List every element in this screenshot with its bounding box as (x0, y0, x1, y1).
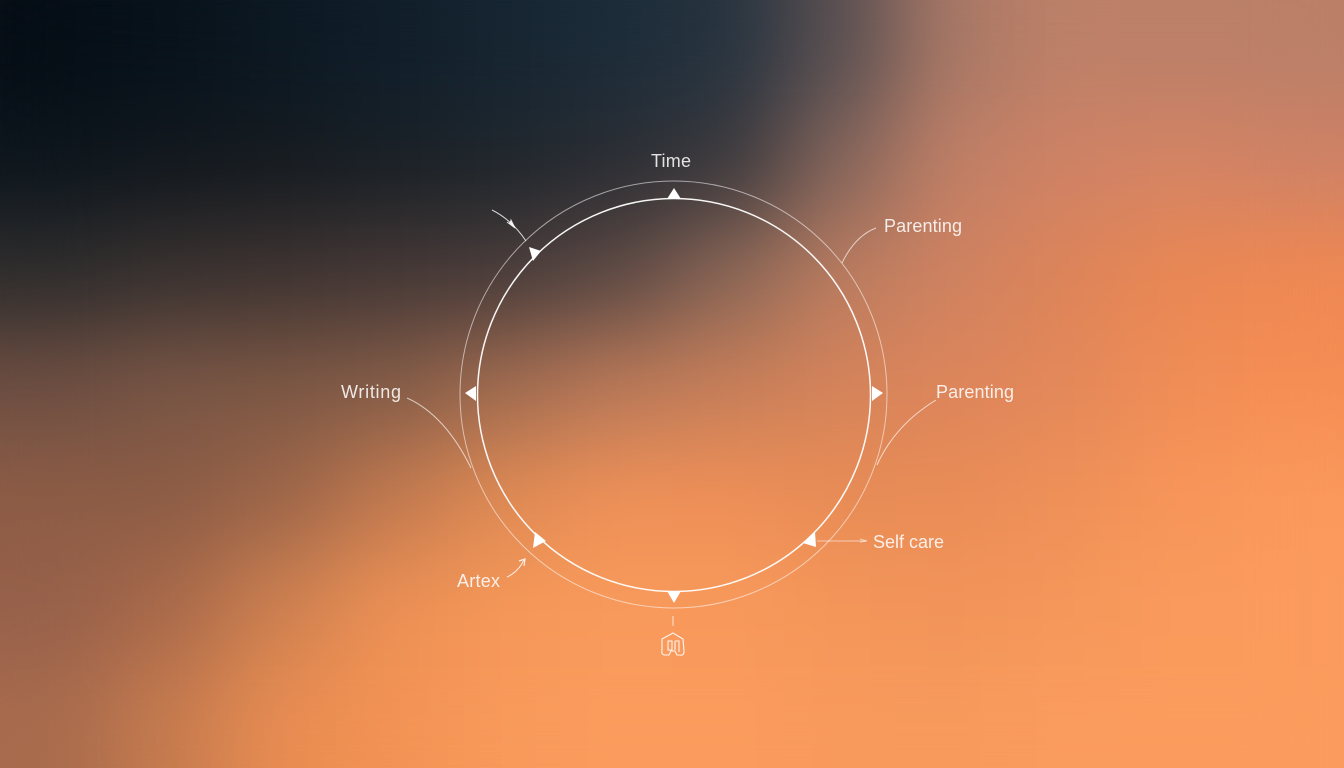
label: Parenting upper: Parenting (884, 216, 962, 236)
connector: Artex (507, 559, 525, 577)
connector: Writing (407, 398, 471, 468)
icon: house (662, 633, 684, 655)
label: Self care: Self care (873, 532, 944, 552)
outer ring (460, 181, 887, 608)
connector: Parenting lower (877, 400, 936, 465)
label: Artex: Artex (457, 571, 500, 591)
tick above icon (672, 616, 674, 626)
connector: Self care (817, 539, 867, 542)
inner ring (478, 198, 870, 592)
label: Parenting lower: Parenting (936, 382, 1014, 402)
label: Time: Time (651, 151, 691, 171)
connector: Parenting upper (842, 228, 876, 263)
connector: unlabeled arrow (492, 210, 526, 241)
ring markers (465, 188, 883, 603)
label: Writing: Writing (341, 382, 401, 402)
cycle diagram (407, 181, 936, 655)
